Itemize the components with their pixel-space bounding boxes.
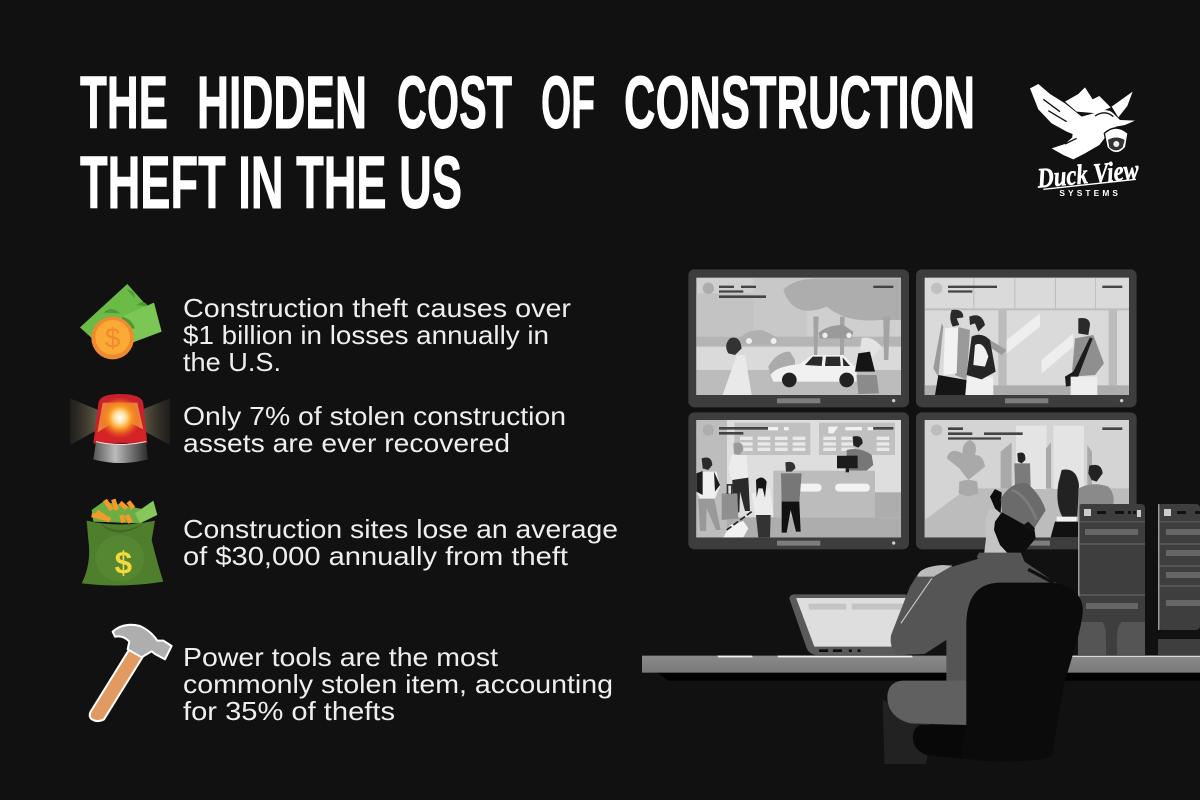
title: THEFT IN THE US	[80, 141, 462, 224]
title: THE	[80, 61, 168, 144]
cap	[1001, 483, 1046, 530]
logo duck	[1030, 84, 1135, 159]
text: average site loss: Construction sites lose an average	[183, 514, 618, 544]
text: recovery: Only 7% of stolen construction	[183, 401, 566, 431]
text: losses: the U.S.	[183, 347, 281, 377]
desk	[642, 656, 1200, 673]
icon: money bag	[82, 499, 163, 585]
text: average site loss	[183, 514, 618, 571]
text: recovery: assets are ever recovered	[183, 428, 510, 458]
icon: money and coin: $	[105, 322, 121, 353]
logo: Duck View Systems	[1030, 84, 1140, 198]
title: HIDDEN	[197, 61, 367, 144]
title: OF	[541, 61, 595, 144]
monitor: lobby scene and operator head	[916, 412, 1137, 555]
icon: money bag: $	[115, 545, 132, 580]
laptop	[789, 594, 906, 655]
monitor: street scene	[688, 269, 909, 407]
icon: siren	[70, 394, 170, 463]
logo mountains	[1065, 87, 1111, 113]
chair back	[961, 583, 1083, 762]
text: power tools: Power tools are the most	[183, 642, 499, 672]
desk shadow	[657, 673, 1200, 681]
neck and face	[984, 508, 1013, 555]
monitor: shopfront scene	[916, 269, 1137, 407]
item 1: losses	[80, 284, 571, 377]
icon: money and coin	[80, 284, 162, 359]
text: losses: $1 billion in losses annually in	[183, 320, 549, 350]
desk and operator	[642, 553, 1200, 764]
item 3: average site loss	[82, 499, 618, 585]
item 2: recovery	[70, 394, 566, 463]
hair	[990, 489, 1036, 554]
text: power tools	[183, 642, 613, 726]
monitor: airport check-in scene	[688, 412, 909, 549]
title	[80, 61, 975, 224]
title: COST	[397, 61, 512, 144]
server rack: left	[1078, 504, 1145, 655]
text: losses	[183, 293, 571, 377]
item 4: power tools	[90, 625, 613, 726]
illustration: security operator at monitors	[642, 269, 1200, 764]
logo camera	[1104, 128, 1128, 153]
chair seat	[913, 725, 1048, 760]
operator legs	[883, 700, 930, 764]
logo wordmark: Duck View	[1035, 155, 1140, 195]
text: recovery	[183, 401, 566, 458]
text: losses: Construction theft causes over	[183, 293, 571, 323]
text: power tools: for 35% of thefts	[183, 696, 395, 726]
icon: hammer	[90, 625, 172, 721]
text: power tools: commonly stolen item, accounting	[183, 669, 613, 699]
operator body	[891, 553, 1059, 727]
server rack: right	[1158, 504, 1200, 655]
logo subtitle: SYSTEMS	[1059, 188, 1118, 198]
text: average site loss: of $30,000 annually from theft	[183, 541, 569, 571]
